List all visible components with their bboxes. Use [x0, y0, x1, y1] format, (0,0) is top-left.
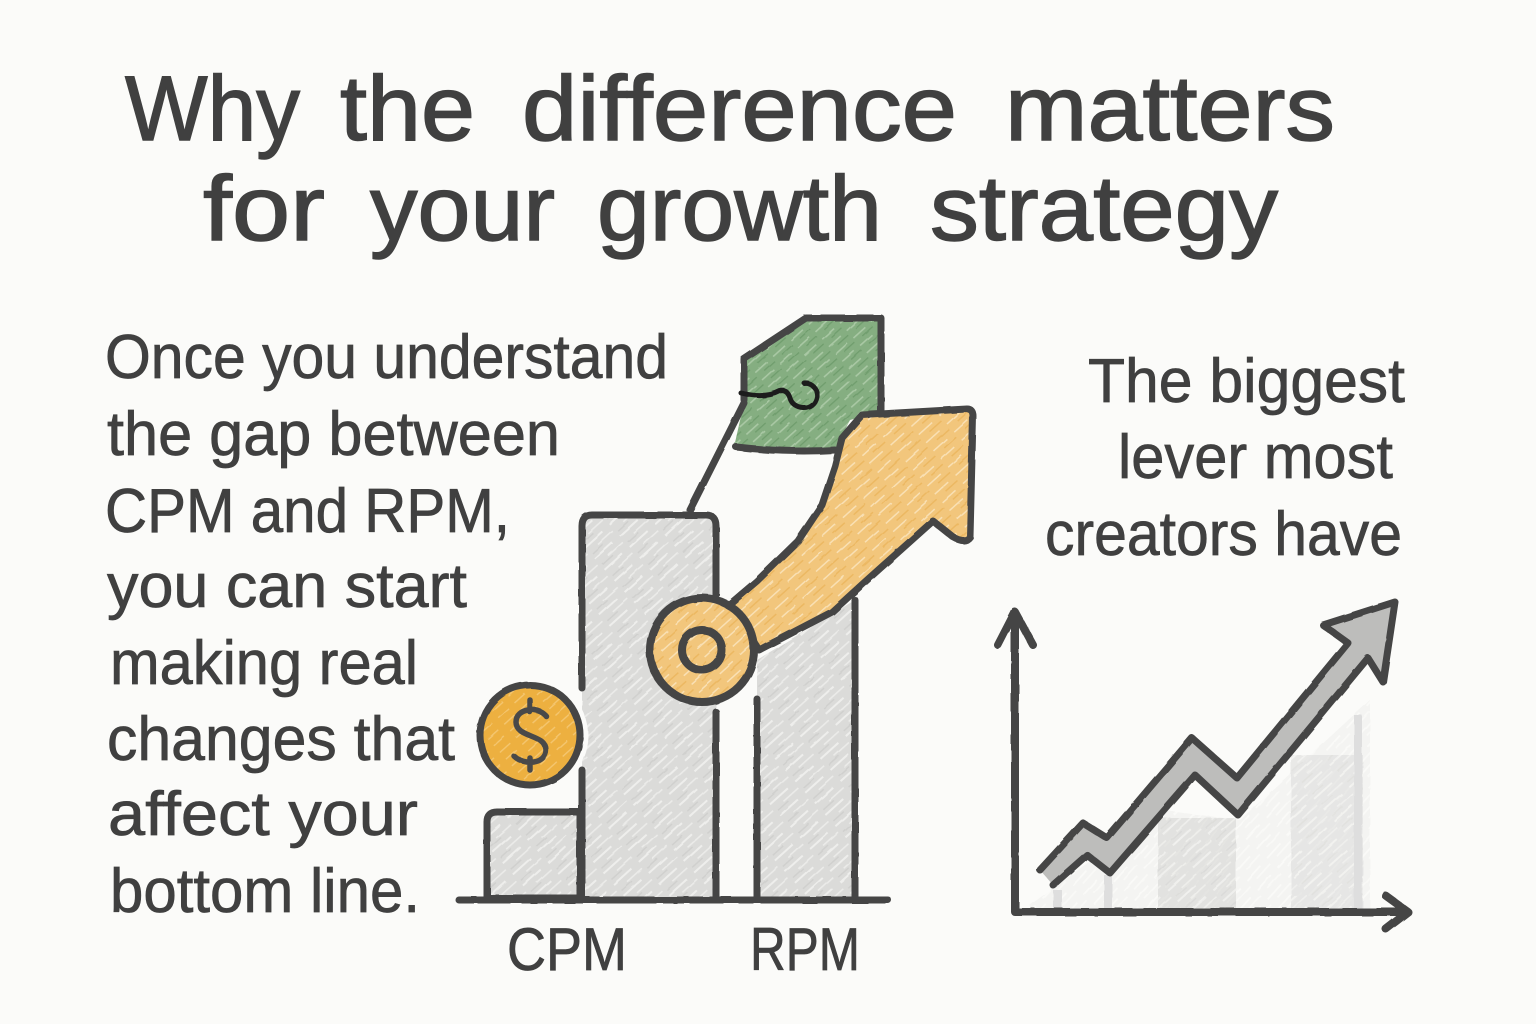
orange growth arrow	[730, 409, 973, 650]
left text block: changes that	[107, 705, 455, 774]
title: growth	[597, 158, 882, 260]
bar labels	[507, 916, 860, 983]
left text block: the gap between	[107, 400, 560, 469]
title: matters	[1005, 58, 1335, 160]
left text block: affect your	[108, 780, 418, 849]
title	[125, 58, 1335, 260]
left text block: making real	[110, 629, 418, 698]
title: difference	[522, 58, 957, 160]
growth line chart	[998, 602, 1408, 929]
left text block: you can start	[107, 552, 467, 621]
rising trend arrow	[1040, 602, 1395, 885]
small bar	[487, 812, 580, 898]
faded background bars	[1030, 700, 1370, 910]
left text block	[105, 323, 668, 926]
central bar chart illustration	[459, 318, 973, 900]
orange wheel	[650, 598, 754, 702]
green price tag	[690, 318, 881, 510]
bar labels: RPM	[750, 916, 860, 983]
axes	[998, 612, 1408, 929]
right text block: The biggest	[1088, 347, 1405, 416]
left text block: CPM and RPM,	[105, 477, 510, 546]
left text block: Once you understand	[105, 323, 668, 392]
title: your	[370, 158, 555, 260]
right text block: creators have	[1045, 500, 1402, 569]
title: for	[203, 158, 325, 260]
title: strategy	[930, 158, 1278, 260]
left text block: bottom line.	[110, 857, 420, 926]
chart baseline	[459, 896, 888, 904]
bar labels: CPM	[507, 916, 627, 983]
right text block: lever most	[1118, 423, 1393, 492]
title: Why	[125, 58, 300, 160]
RPM bar	[757, 600, 855, 898]
title: the	[340, 58, 475, 160]
right text block	[1045, 347, 1405, 569]
dollar coin	[472, 677, 588, 793]
tall CPM bar	[582, 515, 716, 898]
